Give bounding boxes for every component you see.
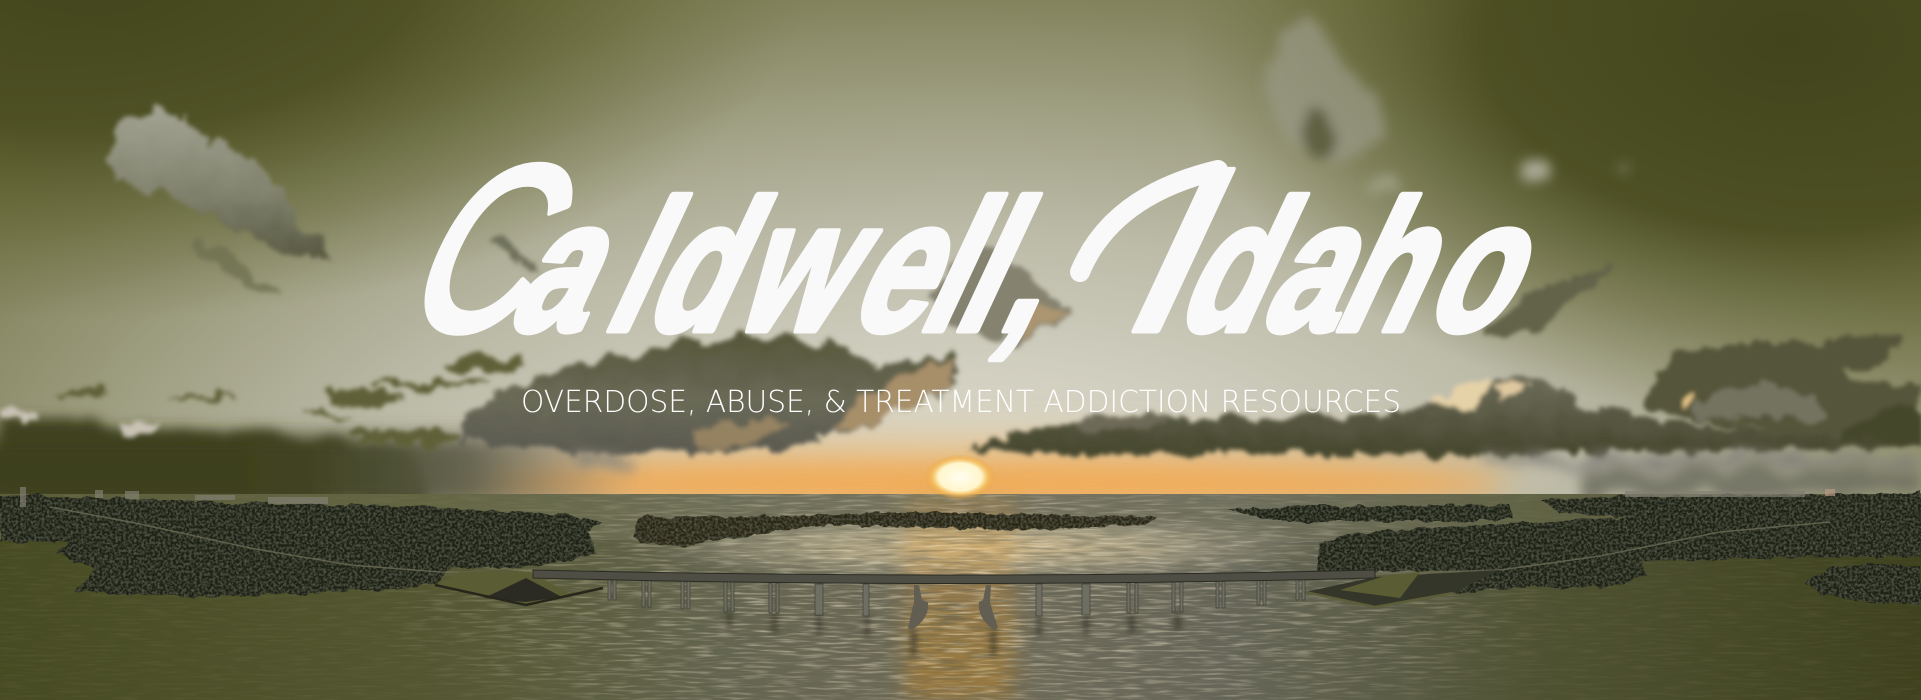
land: upper right island: [1228, 505, 1513, 522]
upper right corner shading: [1100, 0, 1921, 460]
title: I: [1100, 120, 1268, 379]
right embankment: [1305, 570, 1500, 607]
cloud: left band fade: [0, 436, 640, 506]
land: far right shore: [1541, 493, 1921, 520]
subtitle: OVERDOSE, ABUSE, & TREATMENT ADDICTION RESOURCES: [521, 385, 1401, 420]
water ripples: [0, 494, 1921, 700]
land: right pocket island: [1455, 563, 1647, 593]
cloud: upper left: [106, 108, 334, 295]
sunset glow on horizon: [440, 454, 1520, 506]
cloud: large far right: [1645, 335, 1921, 445]
cloud: upper centre right: [1262, 20, 1385, 160]
cloud: long right bank: [968, 377, 1921, 454]
cloud: thin horizon wisps right: [1480, 455, 1921, 496]
clouds: [0, 20, 1921, 506]
cloud: central bank: [462, 337, 957, 451]
sun reflection column: [905, 494, 1015, 700]
bridge: [533, 570, 1375, 656]
bright water above bridge: [645, 512, 1325, 584]
cloud: small right puffs: [1376, 163, 1626, 197]
roads: [50, 507, 1830, 574]
bridge pier shadows: [726, 612, 1181, 656]
title: daho: [1154, 161, 1580, 370]
dark land masses: [0, 493, 1921, 605]
upper left corner shading: [0, 0, 1000, 420]
cloud: behind comma: [930, 245, 1075, 345]
land: far right island: [1806, 563, 1921, 605]
sun: [924, 454, 996, 500]
title: C: [372, 116, 618, 380]
cloud: right of title: [1480, 265, 1610, 337]
sky background: [0, 0, 1921, 506]
title flourish on the capital I: [1080, 170, 1218, 272]
cloud: pale highlights left: [0, 412, 160, 434]
cloud: dark left band: [0, 418, 420, 500]
far shore buildings: [20, 487, 1835, 507]
land: central island: [632, 512, 1158, 546]
cloud: small purple low: [570, 456, 642, 468]
bridge deck: [533, 570, 1375, 584]
left embankment: [435, 572, 603, 605]
land: main right shore: [1317, 515, 1921, 572]
title: aldwell,: [486, 161, 1136, 370]
cloud: small left wisps: [56, 355, 521, 445]
water: [0, 494, 1921, 700]
bridge piers: [608, 576, 1305, 616]
land: left shore: [0, 495, 602, 597]
bridge fenders: [908, 585, 998, 630]
cloud: behind C: [488, 238, 536, 270]
